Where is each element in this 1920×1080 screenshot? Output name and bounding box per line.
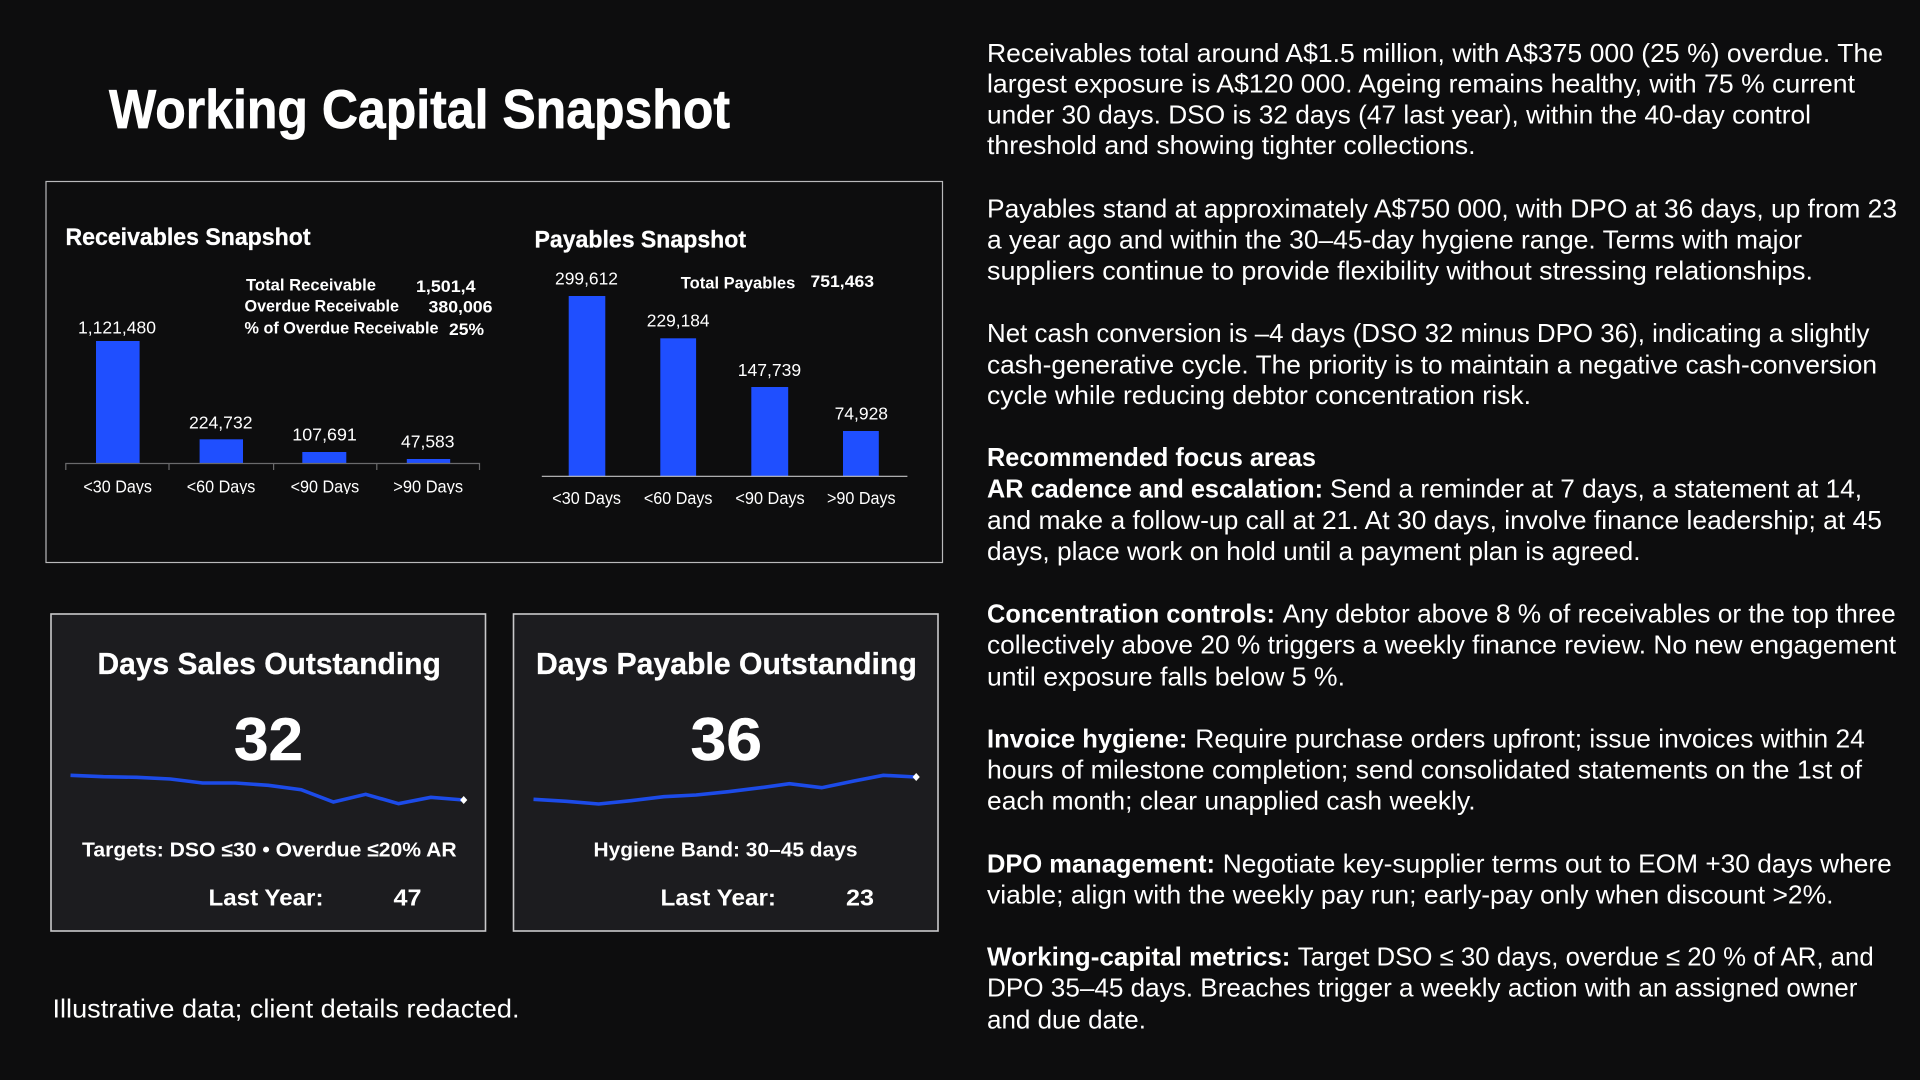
paragraph: invoice hygiene: Require purchase orders upfront; issue invoices within 24 xyxy=(1195,723,1865,753)
bar chart: receivables: <30 Days xyxy=(83,477,152,497)
bar chart: payables: 74,928 xyxy=(835,404,888,424)
sparkline: DPO xyxy=(534,773,920,804)
sparkline: DSO xyxy=(70,775,467,804)
payables summary: 751,463 xyxy=(810,272,874,291)
bar chart: receivables: 47,583 xyxy=(401,432,454,452)
receivables summary: 1,501,4 xyxy=(416,277,476,296)
hygiene band: Hygiene Band: 30–45 days xyxy=(594,840,858,862)
paragraph: net cash conversion: Net cash conversion is –4 days (DSO 32 minus DPO 36), indicating a slightly xyxy=(987,318,1870,348)
paragraph: payables: a year ago and within the 30–45-day hygiene range. Terms with major xyxy=(987,225,1802,255)
paragraph: payables xyxy=(987,194,1897,285)
paragraph: receivables xyxy=(987,38,1883,160)
paragraph: invoice hygiene xyxy=(987,723,1865,815)
bar chart: payables: <90 Days xyxy=(735,488,805,508)
targets: DSO: Targets: DSO ≤30 • Overdue ≤20% AR xyxy=(82,840,457,862)
bar chart: payables: 229,184 xyxy=(647,311,710,331)
bar chart: payables xyxy=(542,268,907,508)
last year: DSO xyxy=(208,884,422,910)
paragraph: AR cadence: Send a reminder at 7 days, a statement at 14, xyxy=(1330,474,1862,504)
paragraph: receivables: under 30 days. DSO is 32 days (47 last year), within the 40-day control xyxy=(987,99,1811,129)
paragraph: receivables: Receivables total around A$1.5 million, with A$375 000 (25 %) overdue. The xyxy=(987,38,1883,68)
footnote: Illustrative data; client details redacted. xyxy=(52,993,520,1023)
bar chart: payables: <60 Days xyxy=(644,488,713,508)
paragraph: AR cadence: days, place work on hold until a payment plan is agreed. xyxy=(987,536,1640,566)
paragraph: working-capital metrics xyxy=(987,941,1874,1034)
receivables summary: 380,006 xyxy=(428,297,492,316)
bar chart: payables: 299,612 xyxy=(555,268,618,288)
card: days payable outstanding xyxy=(514,614,938,931)
bar chart: receivables: <60 Days xyxy=(187,477,256,497)
paragraph: concentration controls: Concentration controls: xyxy=(987,599,1275,629)
heading: receivables: Receivables Snapshot xyxy=(66,224,311,251)
card: days sales outstanding xyxy=(51,614,486,931)
paragraph: DPO management: Negotiate key-supplier terms out to EOM +30 days where xyxy=(1223,849,1892,879)
bar chart: receivables: >90 Days xyxy=(393,477,463,497)
paragraph: DPO management: DPO management: xyxy=(987,849,1215,879)
paragraph: net cash conversion: cash-generative cycle. The priority is to maintain a negative cash-conversion xyxy=(987,349,1877,379)
receivables summary: % of Overdue Receivable xyxy=(244,318,438,337)
paragraph: AR cadence: and make a follow-up call at 21. At 30 days, involve finance leadership; at 45 xyxy=(987,505,1882,535)
bar chart: receivables: 1,121,480 xyxy=(78,318,156,338)
paragraph: concentration controls xyxy=(987,599,1897,691)
value: DSO: 32 xyxy=(234,706,303,773)
last year: DPO: Last Year: xyxy=(660,884,776,910)
last year: DSO: Last Year: xyxy=(208,884,324,910)
receivables summary xyxy=(244,276,492,339)
bar chart: payables: 147,739 xyxy=(738,360,801,380)
paragraph: working-capital metrics: Working-capital metrics: xyxy=(987,941,1290,971)
paragraph: net cash conversion xyxy=(987,318,1877,410)
paragraph: AR cadence: AR cadence and escalation: xyxy=(987,474,1323,504)
title: Working Capital Snapshot xyxy=(109,78,730,140)
paragraph: concentration controls: Any debtor above 8 % of receivables or the top three xyxy=(1283,599,1896,629)
receivables summary: Total Receivable xyxy=(246,276,376,295)
paragraph: invoice hygiene: each month; clear unapplied cash weekly. xyxy=(987,785,1476,815)
bar chart: receivables: <90 Days xyxy=(291,477,359,497)
paragraph: concentration controls: collectively above 20 % triggers a weekly finance review. No new engagement xyxy=(987,629,1897,659)
paragraph: AR cadence xyxy=(987,474,1882,566)
last year: DPO xyxy=(660,884,874,910)
paragraph: DPO management: viable; align with the weekly pay run; early-pay only when discount >2%. xyxy=(987,879,1834,909)
bar chart: payables: <30 Days xyxy=(552,488,621,508)
bar chart: receivables: 107,691 xyxy=(292,425,357,445)
paragraph: invoice hygiene: Invoice hygiene: xyxy=(987,723,1187,753)
payables summary xyxy=(681,272,874,293)
receivables summary: Overdue Receivable xyxy=(244,297,399,316)
paragraph: net cash conversion: cycle while reducing debtor concentration risk. xyxy=(987,380,1531,410)
paragraph: DPO management xyxy=(987,849,1892,909)
heading: recommended focus areas: Recommended focus areas xyxy=(987,442,1316,472)
paragraph: working-capital metrics: DPO 35–45 days. Breaches trigger a weekly action with an assigned owner xyxy=(987,973,1858,1003)
bar chart: receivables: 224,732 xyxy=(189,412,252,432)
payables summary: Total Payables xyxy=(681,274,795,293)
commentary column xyxy=(987,38,1897,1034)
paragraph: receivables: largest exposure is A$120 000. Ageing remains healthy, with 75 % current xyxy=(987,69,1856,99)
bar chart: payables: >90 Days xyxy=(827,488,896,508)
paragraph: working-capital metrics: and due date. xyxy=(987,1004,1146,1034)
paragraph: payables: Payables stand at approximately A$750 000, with DPO at 36 days, up from 23 xyxy=(987,194,1897,224)
last year: DPO: 23 xyxy=(846,884,874,910)
heading: DPO: Days Payable Outstanding xyxy=(536,646,917,681)
heading: DSO: Days Sales Outstanding xyxy=(98,646,441,681)
heading: payables: Payables Snapshot xyxy=(534,226,746,253)
last year: DSO: 47 xyxy=(394,884,422,910)
paragraph: concentration controls: until exposure falls below 5 %. xyxy=(987,661,1345,691)
paragraph: invoice hygiene: hours of milestone completion; send consolidated statements on the 1st of xyxy=(987,754,1863,784)
receivables summary: 25% xyxy=(449,320,484,339)
panel: snapshots xyxy=(46,182,942,562)
paragraph: payables: suppliers continue to provide flexibility without stressing relationships. xyxy=(987,255,1813,285)
paragraph: receivables: threshold and showing tighter collections. xyxy=(987,130,1476,160)
value: DPO: 36 xyxy=(690,706,762,773)
bar chart: receivables xyxy=(66,318,480,497)
paragraph: working-capital metrics: Target DSO ≤ 30 days, overdue ≤ 20 % of AR, and xyxy=(1298,941,1874,971)
